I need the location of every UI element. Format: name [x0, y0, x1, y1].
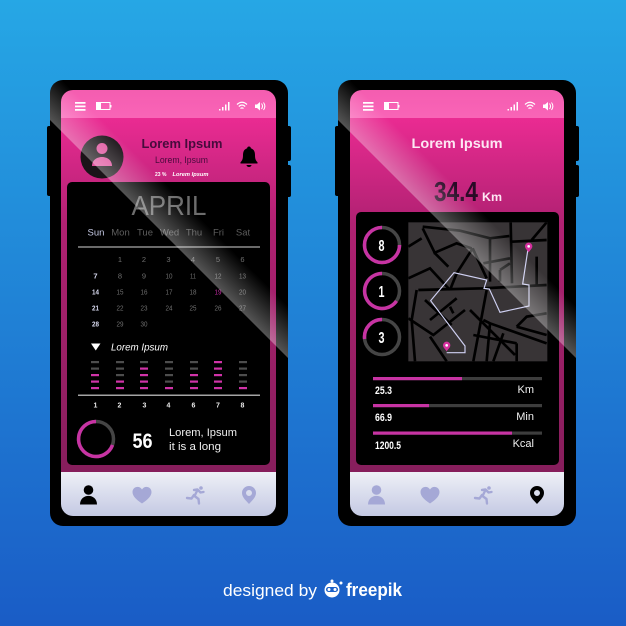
ring: 1: 1	[378, 284, 385, 301]
credit text: designed by	[223, 581, 318, 600]
route line	[431, 247, 529, 353]
icon: freepik logo	[324, 580, 342, 598]
distance unit: Km	[482, 190, 502, 204]
icon: map pin active	[530, 486, 544, 504]
calendar dates: 9	[142, 272, 146, 280]
icon: runner	[187, 486, 204, 504]
icon: signal	[219, 102, 230, 110]
ring: 1	[364, 274, 400, 308]
calendar dates: 13	[239, 272, 246, 280]
bar chart	[78, 361, 260, 410]
calendar dates: 7	[93, 272, 98, 280]
progress: kcal	[373, 432, 542, 452]
weekday headers: Tue	[137, 228, 153, 238]
icon: person	[368, 485, 385, 504]
calendar dates: 2	[142, 255, 146, 264]
calendar dates: 29	[116, 320, 124, 328]
calendar dates	[92, 255, 246, 328]
month heading: APRIL	[132, 190, 206, 221]
icon: runner	[475, 486, 492, 504]
calendar dates: 19	[214, 288, 222, 296]
screen title: Lorem Ipsum	[412, 136, 502, 151]
calendar dates: 12	[214, 272, 222, 280]
side buttons	[47, 126, 291, 197]
progress: min	[373, 404, 542, 424]
profile name: Lorem Ipsum	[142, 137, 222, 151]
status bar	[350, 90, 564, 118]
ring: 8: 8	[378, 238, 385, 255]
icon: menu	[363, 102, 374, 111]
bar chart: 1	[94, 402, 98, 410]
calendar dates: 14	[92, 288, 100, 296]
phone: calendar screen	[47, 80, 291, 526]
footer credit	[223, 580, 403, 600]
profile stat label: Lorem Ipsum	[172, 172, 209, 178]
icon: battery	[96, 102, 112, 110]
icon: menu	[75, 102, 86, 111]
progress: km: 25.3	[375, 385, 392, 397]
calendar dates: 30	[140, 320, 148, 328]
bar chart: 4	[167, 402, 171, 410]
weekday headers: Sat	[236, 228, 250, 238]
progress: km: Km	[518, 384, 534, 396]
stat description	[169, 427, 237, 453]
calendar dates: 20	[239, 288, 246, 296]
icon: speaker	[543, 102, 553, 110]
status bar	[61, 90, 276, 118]
screen background	[350, 118, 564, 472]
map pin: start	[443, 342, 450, 351]
chart heading: Lorem Ipsum	[111, 342, 168, 354]
panel: calendar	[67, 182, 270, 465]
progress: min: Min	[516, 411, 534, 423]
panel: route	[356, 212, 559, 465]
icon: map pin	[242, 486, 256, 504]
calendar dates: 10	[166, 272, 172, 280]
calendar dates: 3	[166, 255, 171, 264]
map	[408, 222, 547, 361]
calendar dates: 25	[190, 304, 196, 312]
calendar dates: 15	[116, 288, 124, 296]
calendar dates: 22	[116, 304, 124, 312]
weekday headers: Wed	[160, 228, 179, 238]
icon: bell	[240, 146, 258, 167]
weekday headers: Fri	[213, 228, 224, 238]
stat description: it is a long	[169, 441, 221, 453]
stat value: 56	[132, 430, 152, 453]
calendar dates: 17	[166, 288, 172, 296]
calendar dates: 27	[239, 304, 246, 312]
calendar dates: 11	[190, 272, 196, 280]
icon: speaker	[255, 102, 265, 110]
screen background	[61, 118, 276, 472]
progress: kcal: Kcal	[513, 438, 534, 450]
calendar dates: 24	[166, 304, 172, 312]
navigation bar	[61, 472, 276, 516]
progress: min: 66.9	[375, 412, 392, 424]
phone body	[50, 80, 288, 526]
progress ring	[78, 422, 114, 456]
calendar dates: 21	[92, 304, 99, 312]
glare	[50, 82, 288, 358]
progress: km	[373, 377, 542, 397]
bar chart: 6	[192, 402, 196, 410]
glare	[338, 82, 576, 358]
icon: wifi	[525, 102, 535, 108]
weekday headers	[88, 228, 250, 238]
calendar dates: 16	[140, 288, 148, 296]
bar chart: 2	[118, 402, 122, 410]
icon: heart	[420, 487, 440, 504]
bar chart: 8	[241, 402, 245, 410]
icon: person active	[80, 485, 97, 504]
brand name: freepik	[346, 580, 403, 600]
ring: 3: 3	[378, 330, 385, 347]
icon: heart	[132, 487, 152, 504]
side buttons	[335, 126, 579, 197]
bar chart: 3	[143, 402, 147, 410]
avatar	[80, 136, 124, 178]
calendar dates: 23	[140, 304, 148, 312]
map pin: end	[525, 243, 532, 252]
stat description: Lorem, Ipsum	[169, 427, 237, 439]
calendar dates: 6	[240, 255, 245, 264]
weekday headers: Thu	[186, 228, 202, 238]
calendar dates: 4	[191, 255, 195, 264]
profile stat: 23 %	[155, 172, 167, 178]
phone: running stats screen	[335, 80, 579, 526]
icon: wifi	[237, 102, 247, 108]
bar chart: 7	[216, 402, 220, 410]
weekday headers: Sun	[88, 228, 104, 238]
icon: battery	[384, 102, 400, 110]
calendar dates: 28	[92, 320, 99, 328]
calendar dates: 5	[216, 255, 220, 264]
distance value: 34.4	[434, 176, 478, 207]
icon: signal	[508, 102, 518, 110]
ring: 3	[364, 320, 400, 354]
calendar dates: 1	[118, 255, 122, 264]
calendar dates: 26	[214, 304, 222, 312]
icon: dropdown triangle	[91, 344, 100, 350]
profile subtitle: Lorem, Ipsum	[155, 155, 208, 165]
ring: 8	[364, 228, 400, 262]
phone body	[338, 80, 576, 526]
weekday headers: Mon	[111, 228, 130, 238]
progress: kcal: 1200.5	[375, 440, 401, 452]
navigation bar	[350, 472, 564, 516]
calendar dates: 8	[118, 272, 122, 280]
calendar dates: 18	[190, 288, 196, 296]
